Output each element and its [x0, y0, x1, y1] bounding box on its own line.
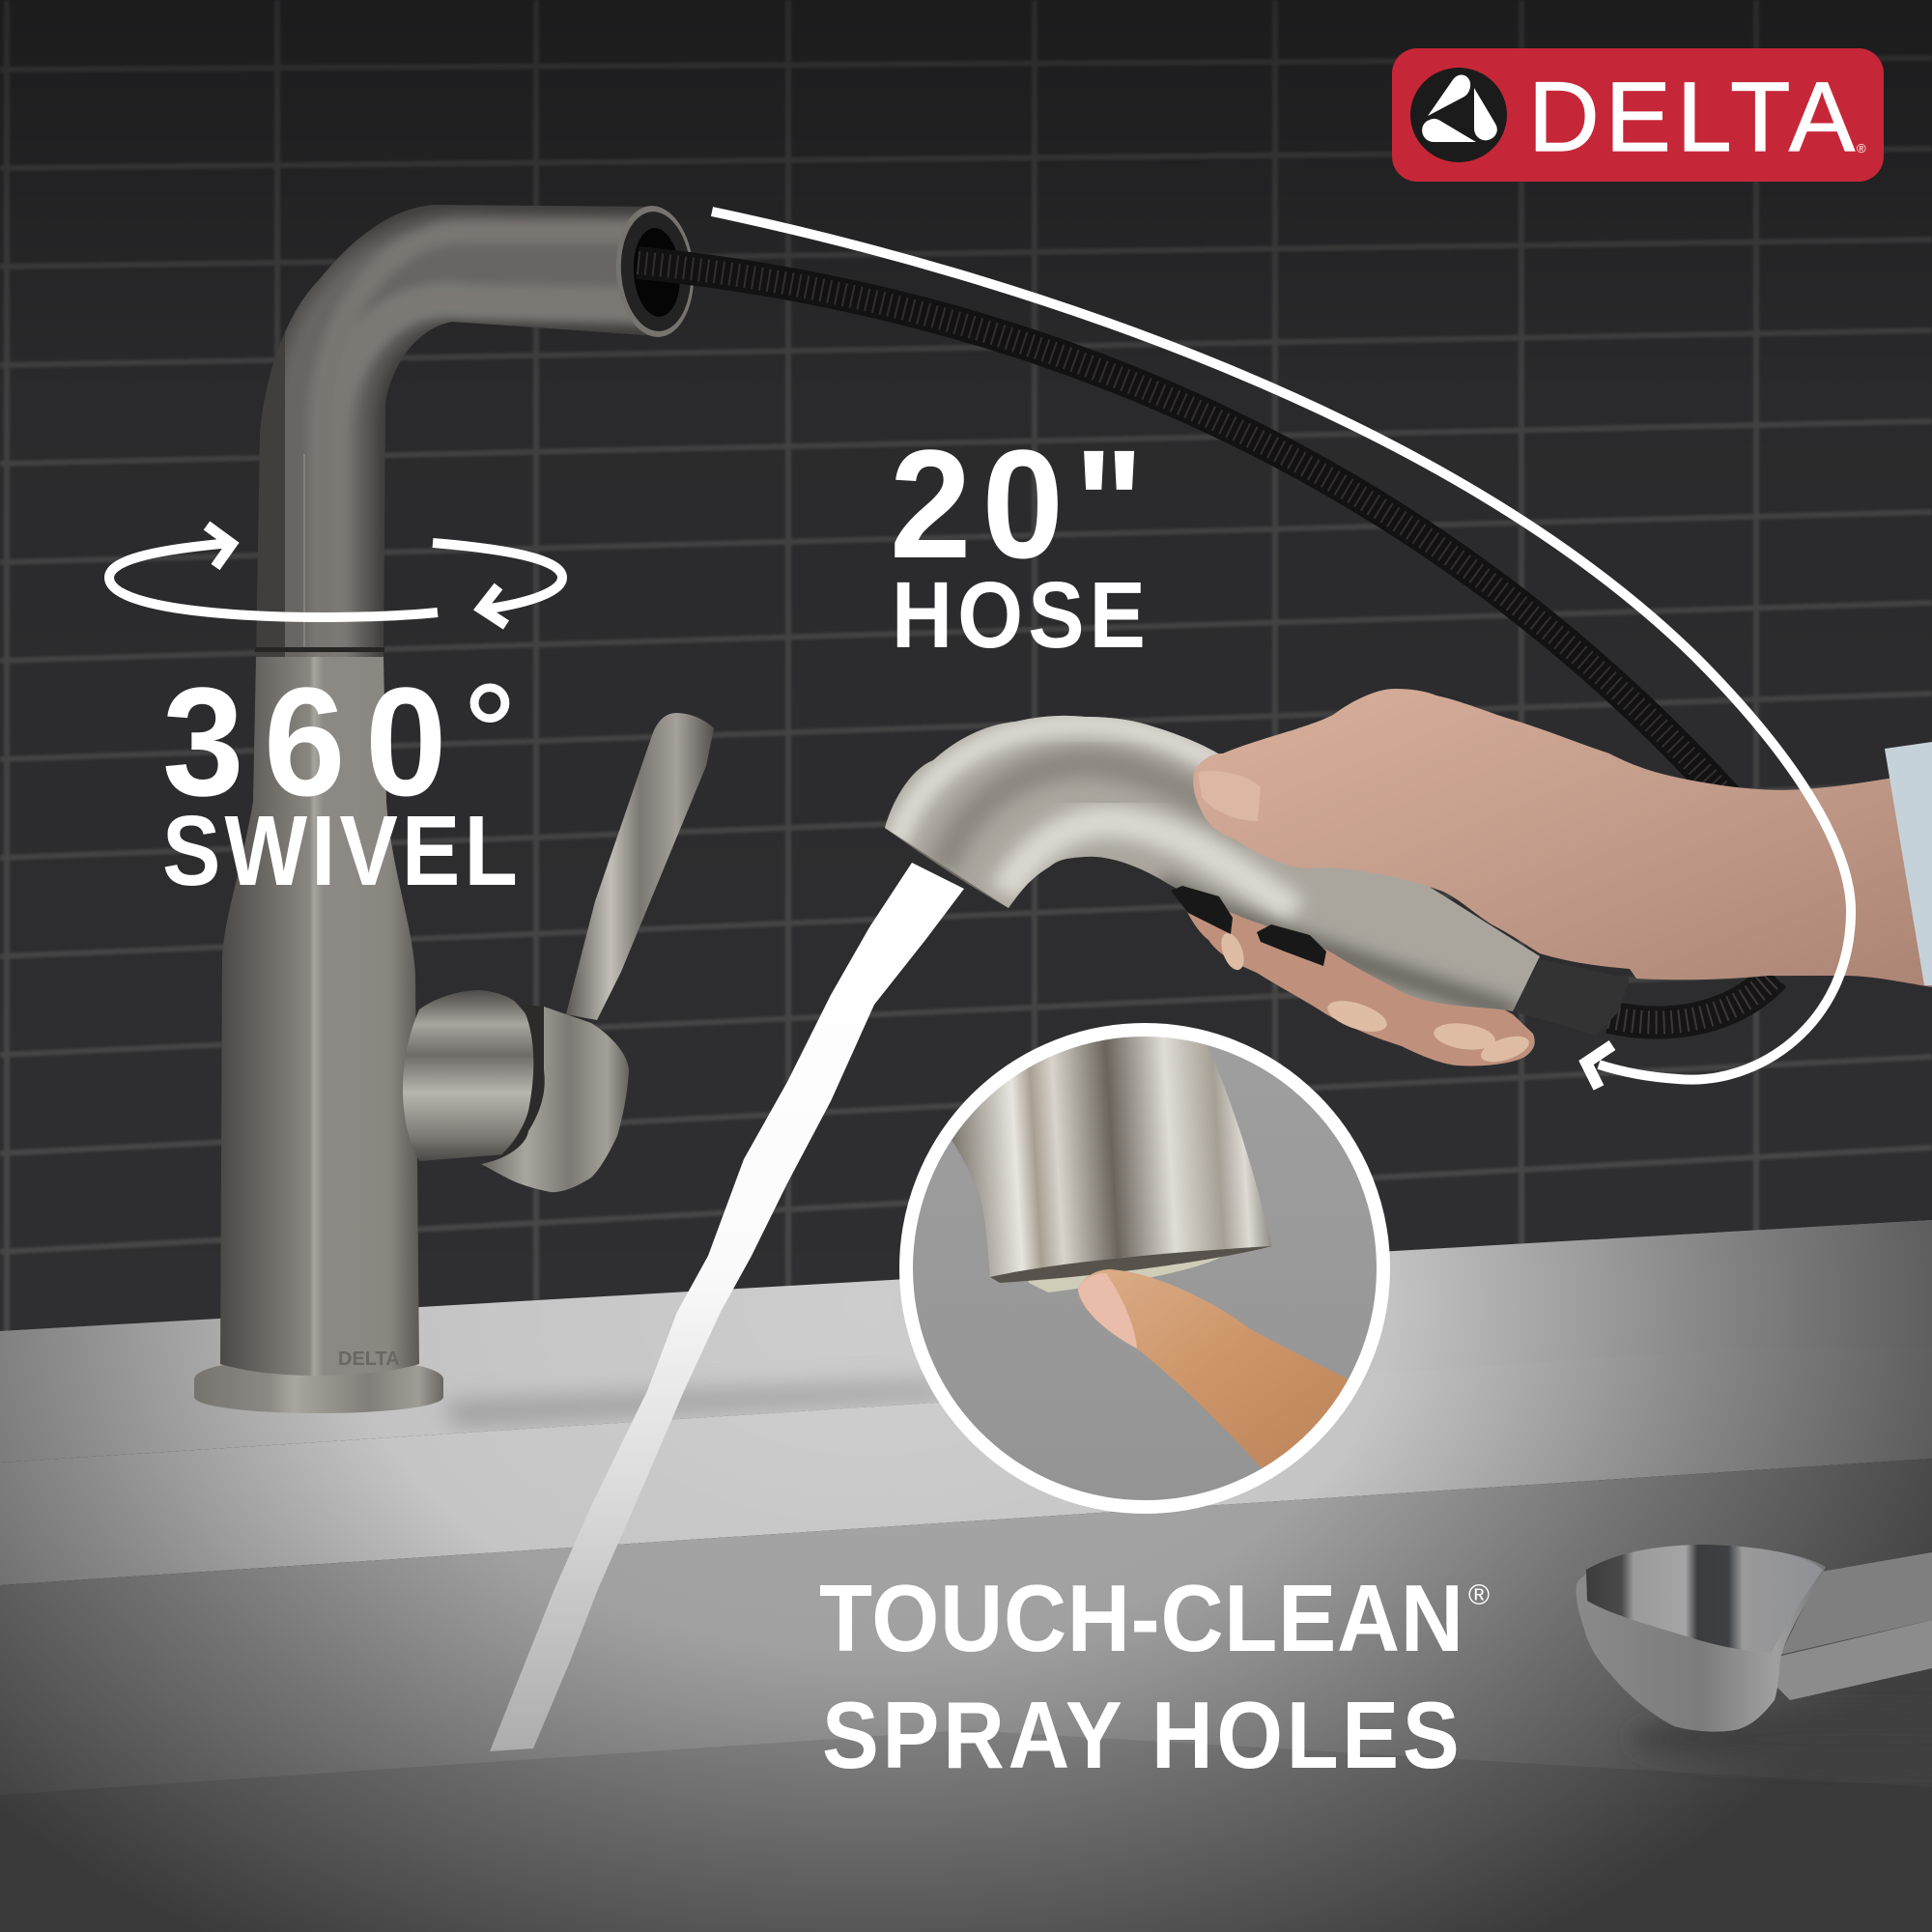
label: 20 inch hose — [890, 418, 1146, 668]
spoon — [1577, 1545, 1932, 1764]
label: 360 swivel: SWIVEL — [162, 795, 518, 906]
finger — [1078, 1269, 1352, 1478]
spoon bowl interior — [1586, 1545, 1823, 1653]
nozzle rim — [990, 1246, 1272, 1283]
spout opening rim — [611, 203, 698, 340]
spout opening — [617, 210, 695, 333]
faucet — [194, 184, 714, 1413]
sink basin — [0, 1459, 1932, 1932]
lower fingers — [1181, 874, 1535, 1065]
hand and sprayer — [869, 689, 1932, 1066]
logo registered mark: ® — [1857, 141, 1866, 156]
spoon bowl — [1577, 1545, 1826, 1732]
spoon shadow — [1633, 1714, 1932, 1764]
nozzle — [952, 1037, 1272, 1277]
label: 360 swivel: ° — [463, 656, 517, 808]
handle collar gap — [481, 1005, 553, 1170]
basin lower rim — [0, 1730, 1932, 1932]
handle lever — [566, 713, 714, 1020]
label: touch-clean spray holes: ® — [1468, 1579, 1490, 1611]
logo: Delta — [1392, 48, 1884, 182]
spoon upper handle — [1780, 1552, 1932, 1655]
shirt sleeve — [1885, 742, 1932, 985]
faucet lower body — [220, 657, 419, 1376]
hose — [638, 263, 1775, 1022]
hand and arm — [1193, 689, 1932, 987]
sprayer head — [885, 715, 1540, 1011]
arrow: swivel right — [433, 543, 562, 625]
arrow: swivel left — [109, 526, 438, 617]
water stream — [490, 863, 964, 1751]
label: 20 inch hose: HOSE — [892, 562, 1146, 668]
faucet collar — [255, 647, 384, 652]
counter front edge — [0, 1348, 1932, 1585]
spoon lower handle — [1776, 1620, 1932, 1700]
label: touch-clean spray holes — [819, 1566, 1490, 1788]
logo wordmark: DELTA — [1528, 62, 1855, 172]
thumb nail — [1198, 771, 1261, 821]
spray nubs — [1024, 1246, 1235, 1293]
logo emblem — [1410, 68, 1507, 162]
label: 20 inch hose: 20" — [890, 418, 1144, 591]
faucet neck and spout — [256, 205, 649, 657]
nozzle tips — [886, 829, 1007, 907]
base logo: DELTA — [338, 1349, 400, 1370]
handle cap — [481, 1007, 629, 1192]
fingernail — [1078, 1273, 1137, 1349]
faucet base flange — [194, 1357, 443, 1413]
sprayer buttons — [1171, 886, 1326, 966]
label: 360 swivel: 360 — [162, 656, 447, 829]
finger nails — [1217, 930, 1532, 1066]
handle hub — [403, 990, 536, 1161]
label: touch-clean spray holes: SPRAY HOLES — [822, 1683, 1460, 1788]
label: touch-clean spray holes: TOUCH-CLEAN — [819, 1566, 1463, 1671]
lower vignette — [0, 1220, 1932, 1932]
arrow: hose length arc — [712, 212, 1851, 1088]
sprayer hose connector — [1513, 959, 1630, 1036]
countertop — [0, 1220, 1932, 1463]
inset: touch-clean detail circle — [906, 966, 1383, 1507]
label: 360 swivel — [162, 656, 518, 906]
spout inner — [631, 226, 683, 319]
faucet shadow on counter — [444, 1381, 966, 1426]
tiled wall background — [0, 0, 1932, 1352]
